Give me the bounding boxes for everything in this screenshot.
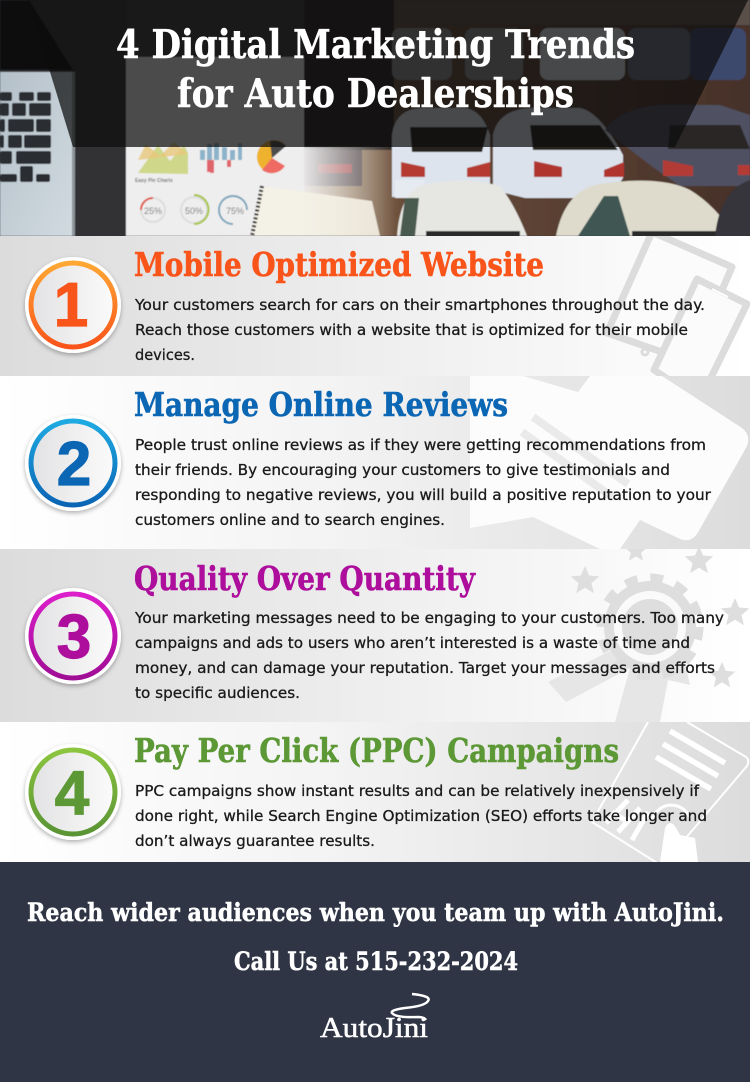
photo: analytics paper: 50% [185,206,203,216]
title: for Auto Dealerships [177,71,574,117]
text block: PPC campaigns show instant results and can be relatively inexpensively if [135,782,700,800]
phone number: Call Us at 515-232-2024 [234,947,518,976]
icon: award rosette with stars [548,539,749,722]
dark title overlay [28,0,748,147]
title [116,22,635,117]
text block: don’t always guarantee results. [135,832,375,850]
text block [134,296,705,364]
panel: quality over quantity [0,539,750,722]
photo: analytics paper: 25% [144,206,162,216]
text block: Your customers search for cars on their smartphones throughout the day. [134,296,705,314]
badge 1: 1 [54,271,88,340]
text block: their friends. By encouraging your customers to give testimonials and [135,461,670,479]
text block: Your marketing messages need to be engaging to your customers. Too many [134,609,724,627]
text block: responding to negative reviews, you will build a positive reputation to your [135,486,712,504]
badge 2 [25,415,121,511]
icon: review speech bubble [470,376,748,549]
text block: to specific audiences. [135,684,300,702]
badge 4 [25,744,121,840]
photo: desk and laptop [0,0,126,236]
heading: Quality Over Quantity [134,559,476,598]
panel: pay per click campaigns [0,722,750,866]
text block: Reach those customers with a website that is optimized for their mobile [135,321,688,339]
heading: Mobile Optimized Website [134,245,544,284]
badge 4: 4 [55,759,90,828]
panel: manage online reviews [0,376,750,549]
heading: Pay Per Click (PPC) Campaigns [134,731,619,770]
text block [135,782,707,850]
text block: money, and can damage your reputation. Target your messages and efforts [135,659,715,677]
title: 4 Digital Marketing Trends [116,22,635,68]
header banner photo [0,0,750,236]
text block: done right, while Search Engine Optimization (SEO) efforts take longer and [135,807,707,825]
photo: analytics paper: 75% [226,206,244,216]
logo: AutoJini: AutoJini [320,1012,428,1044]
panel: footer [0,862,750,1082]
text block: devices. [135,346,195,364]
badge 1 [25,257,121,353]
text block: People trust online reviews as if they were getting recommendations from [135,436,706,454]
photo: analytics paper [126,57,396,236]
badge 2: 2 [57,430,91,499]
logo: AutoJini [320,994,429,1044]
badge 3 [25,588,121,684]
text block [134,609,724,702]
text block: customers online and to search engines. [135,511,445,529]
icon: phone and tablet [604,236,750,376]
photo: analytics paper: Easy Pie Charts [135,178,173,184]
photo: parked cars [304,0,750,236]
panel: mobile optimized website [0,236,750,376]
badge 3: 3 [57,603,91,672]
text block: campaigns and ads to users who aren’t interested is a waste of time and [135,634,690,652]
icon: clicked document [592,722,748,866]
text block [135,436,712,529]
heading: Manage Online Reviews [134,385,508,424]
